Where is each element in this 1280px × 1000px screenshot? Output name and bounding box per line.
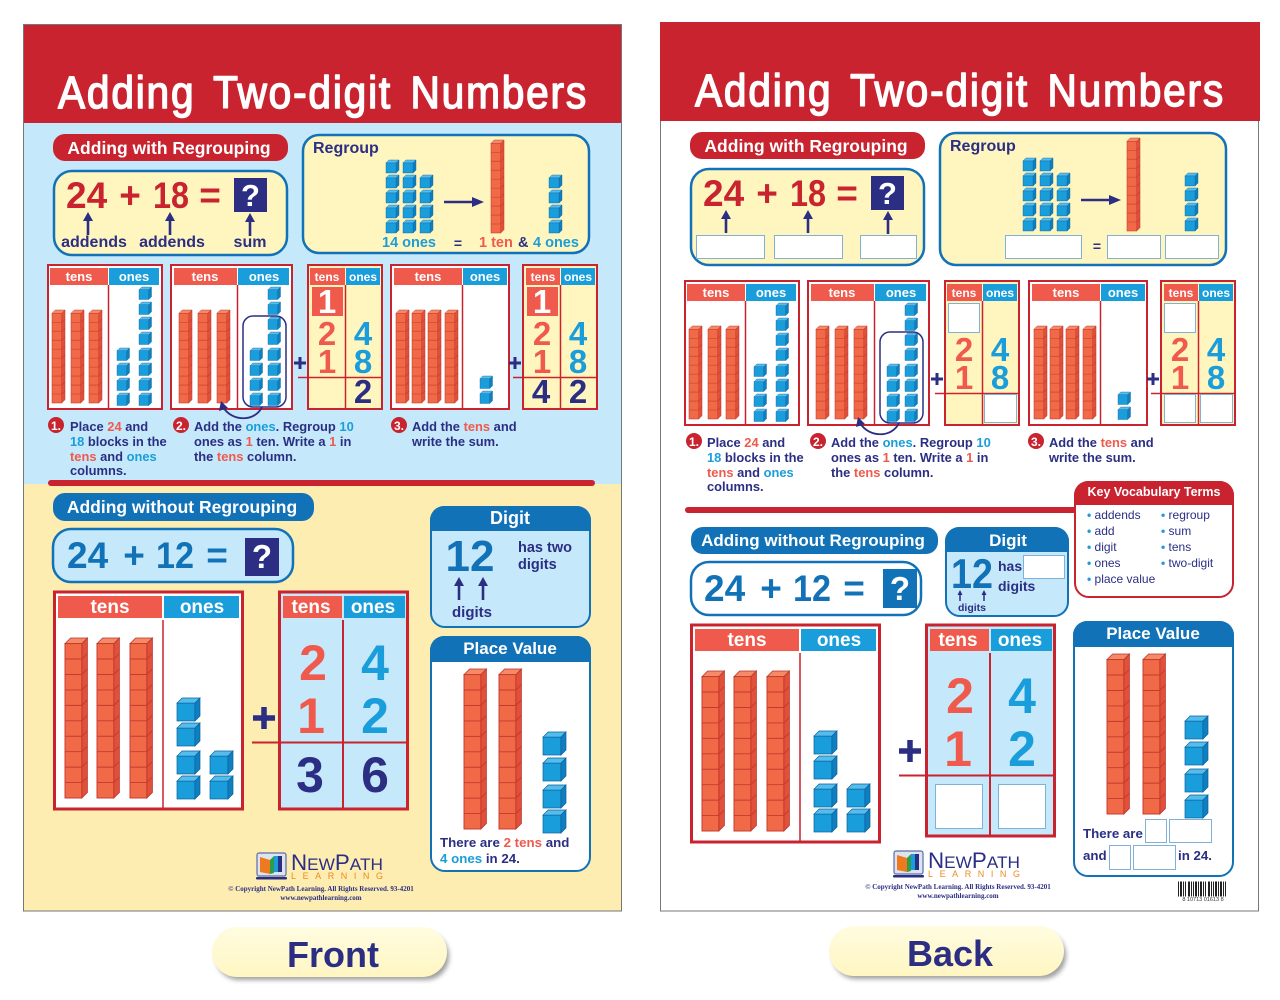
title: front: Adding Two-digit Numbers [58, 67, 588, 118]
text: step 1: 1. [51, 419, 61, 433]
panel: place value (back): Place Value [1106, 624, 1200, 643]
panel: regroup (back): Regroup [950, 138, 1016, 155]
heading: adding without regrouping [53, 493, 314, 521]
text: step 3: write the sum. [411, 434, 499, 449]
panel: step 2 place value chart (back) [808, 281, 929, 434]
panel: step 3 sum with blanks: 1 [1171, 359, 1189, 396]
panel: step 3 place value chart: ones [470, 269, 500, 284]
panel: digit (back): has [998, 558, 1022, 574]
panel: place value: 4 ones in 24. [440, 851, 520, 866]
panel: equation 24 + 12 (back): = [843, 568, 865, 609]
barcode: 8 10713 01613 8 [1182, 897, 1224, 903]
panel: step 3 written sum: 1 [533, 343, 551, 380]
panel: step 3 written sum [509, 265, 597, 410]
text: step 2 (back) [810, 433, 991, 480]
panel: step 3 written sum: 4 [532, 373, 551, 410]
logo: front: LEARNING [291, 871, 383, 881]
panel: step 2 sum with blanks [931, 281, 1019, 425]
panel: step 3 written sum: 1 [533, 283, 551, 320]
panel: regroup: 4 ones [533, 235, 579, 251]
panel: step 3 sum with blanks: ones [1202, 286, 1230, 300]
panel: step 2 sum with blanks: 2 [955, 331, 973, 368]
panel: step 3 sum with blanks: 4 [1207, 331, 1226, 368]
text: step 3 (back): Add the tens and [1049, 435, 1154, 450]
panel: step 2 sum with blanks: tens [952, 286, 977, 300]
text: step 1: columns. [70, 463, 127, 478]
panel: place value (back): There are [1083, 826, 1143, 841]
panel: equation 24 + 18: 24 [66, 175, 108, 216]
logo: front: NEWPATH [291, 850, 383, 875]
panel: step 3 written sum: ones [564, 270, 592, 284]
panel: place value: Place Value [463, 639, 557, 658]
panel: key vocabulary terms: • regroup [1161, 508, 1210, 522]
panel: regroup: & [518, 235, 529, 251]
text: step 3 (back): write the sum. [1048, 450, 1136, 465]
panel: step 3 sum with blanks: 8 [1207, 359, 1225, 396]
logo: back: © Copyright NewPath Learning. All Rights Reserved. 93-4201 [865, 883, 1051, 891]
text: step 2 (back): ones as 1 ten. Write a 1 in [831, 450, 989, 465]
panel: large written sum: tens [291, 597, 331, 618]
panel: equation with blanks: ? [878, 176, 897, 211]
panel: key vocabulary terms: • add [1087, 524, 1115, 538]
panel: digit (back): digits [958, 602, 986, 614]
panel: equation 24 + 12 (back): + [760, 568, 782, 609]
panel: equation 24 + 18 [54, 171, 287, 255]
text: step 3 (back) [1028, 433, 1154, 465]
panel: equation 24 + 12 (back): 12 [793, 568, 831, 609]
heading: adding without regrouping: Adding without Regrouping [67, 497, 297, 517]
panel: key vocabulary terms: • two-digit [1161, 556, 1214, 570]
panel: large place value chart (back) [692, 625, 880, 842]
panel: digit (back): digits [998, 578, 1036, 594]
panel: step 3 sum with blanks: tens [1169, 286, 1194, 300]
panel: step 3 written sum: 2 [569, 373, 587, 410]
logo: back [865, 848, 1051, 900]
panel: equation 24 + 18: + [119, 175, 141, 216]
text: step 1 (back) [686, 433, 804, 494]
panel: step 2 written sum: 2 [354, 373, 372, 410]
panel: equation 24 + 12 [53, 529, 293, 582]
panel: step 2 written sum: 8 [354, 343, 372, 380]
panel: place value [430, 636, 591, 871]
panel: step 2 place value chart (back): ones [886, 285, 916, 300]
panel: place value (back): in 24. [1178, 848, 1212, 863]
text: step 3 (back): 3. [1031, 435, 1041, 449]
poster: back [660, 22, 1260, 911]
panel: step 1 place value chart: ones [119, 269, 149, 284]
panel: step 1 place value chart [48, 265, 162, 409]
panel: key vocabulary terms: • place value [1087, 572, 1156, 586]
panel: large written sum: 1 [297, 688, 325, 744]
panel: place value: There are 2 tens and [440, 835, 569, 850]
panel: large sum with blanks: 2 [946, 668, 974, 724]
panel: equation 24 + 18: ? [241, 178, 260, 213]
text: step 3: Add the tens and [412, 419, 517, 434]
panel: step 2 sum with blanks: ones [986, 286, 1014, 300]
panel: large place value chart: ones [180, 597, 224, 618]
panel: step 2 place value chart: ones [249, 269, 279, 284]
panel: regroup: Regroup [313, 140, 379, 157]
panel: equation 24 + 18: 18 [153, 175, 189, 216]
panel: digit: digits [518, 557, 557, 573]
heading: adding with regrouping (back) [690, 132, 925, 159]
panel: step 2 written sum: tens [315, 270, 340, 284]
panel: step 1 place value chart: tens [66, 269, 92, 284]
panel: step 3 place value chart: tens [415, 269, 441, 284]
heading: adding with regrouping [53, 134, 288, 161]
panel: step 1 place value chart (back): ones [756, 285, 786, 300]
panel: regroup (back): = [1093, 238, 1101, 254]
panel: equation 24 + 12 (back): ? [890, 570, 910, 607]
panel: place value (back) [1073, 621, 1234, 876]
panel: digit: has two [518, 540, 572, 556]
panel: equation 24 + 12 (back) [691, 562, 921, 615]
panel: large sum with blanks [899, 625, 1055, 836]
panel: large place value chart [54, 592, 242, 809]
panel: equation 24 + 12 (back): 24 [704, 568, 746, 609]
panel: step 3 place value chart (back): ones [1108, 285, 1138, 300]
panel: step 2 sum with blanks: 4 [991, 331, 1010, 368]
poster: front [24, 24, 622, 911]
panel: equation 24 + 18: addends [61, 234, 127, 251]
logo: back: LEARNING [928, 869, 1020, 879]
panel: step 2 place value chart (back): tens [829, 285, 855, 300]
text: step 2 (back): the tens column. [831, 465, 933, 480]
panel: large written sum: ones [351, 597, 395, 618]
panel: step 3 place value chart (back): tens [1053, 285, 1079, 300]
text: step 1 (back): columns. [707, 479, 764, 494]
panel: step 2 place value chart: tens [192, 269, 218, 284]
panel: digit (back): Digit [989, 531, 1027, 550]
panel: equation 24 + 18: = [199, 175, 221, 216]
panel: step 3 written sum: 8 [569, 343, 587, 380]
text: step 2: Add the ones. Regroup 10 [194, 419, 354, 434]
panel: key vocabulary terms: • addends [1087, 508, 1141, 522]
text: step 1 [48, 417, 167, 478]
button: back [829, 926, 1066, 979]
panel: digit (back) [945, 527, 1069, 616]
text: step 1: Place 24 and [70, 419, 148, 434]
text: step 2: 2. [176, 419, 186, 433]
title: back: Adding Two-digit Numbers [695, 65, 1225, 116]
panel: large sum with blanks: 4 [1008, 668, 1036, 724]
text: step 3: 3. [394, 419, 404, 433]
text: step 2 [173, 417, 354, 464]
panel: key vocabulary terms: Key Vocabulary Terms [1088, 485, 1221, 499]
barcode [1178, 889, 1228, 903]
panel: key vocabulary terms: • digit [1087, 540, 1117, 554]
text: step 1: tens and ones [70, 449, 157, 464]
panel: step 3 place value chart (back) [1029, 281, 1147, 425]
text: step 1 (back): Place 24 and [707, 435, 785, 450]
button: back: Back [907, 933, 994, 974]
panel: digit: 12 [446, 532, 494, 581]
panel: step 3 sum with blanks [1147, 281, 1235, 425]
panel: equation with blanks: = [836, 173, 858, 214]
logo: back: www.newpathlearning.com [917, 892, 999, 900]
text: step 1: 18 blocks in the [70, 434, 167, 449]
heading: adding without regrouping (back): Adding without Regrouping [701, 531, 925, 550]
logo: front: www.newpathlearning.com [280, 894, 362, 902]
panel: step 3 written sum: 4 [569, 315, 588, 352]
text: step 1 (back): 18 blocks in the [707, 450, 804, 465]
heading: adding with regrouping (back): Adding with Regrouping [704, 136, 908, 156]
panel: large written sum [252, 592, 408, 809]
button: front: Front [287, 934, 379, 975]
panel: digit (back): 12 [951, 550, 993, 597]
heading: adding without regrouping (back) [691, 527, 938, 554]
panel: equation with blanks: 18 [790, 173, 826, 214]
panel: step 2 place value chart [171, 265, 292, 418]
panel: regroup [303, 135, 589, 253]
panel: step 3 sum with blanks: 2 [1171, 331, 1189, 368]
text: step 2: ones as 1 ten. Write a 1 in [194, 434, 352, 449]
panel: step 2 written sum [294, 265, 382, 410]
panel: large place value chart: tens [90, 597, 130, 618]
text: step 2 (back): Add the ones. Regroup 10 [831, 435, 991, 450]
panel: equation 24 + 12: = [206, 535, 228, 576]
panel: key vocabulary terms: • ones [1087, 556, 1121, 570]
panel: regroup (back) [940, 133, 1226, 265]
panel: step 1 place value chart (back) [685, 281, 799, 425]
panel: large place value chart (back): tens [727, 630, 767, 651]
panel: large sum with blanks: ones [998, 630, 1042, 651]
panel: large written sum: 6 [361, 747, 389, 803]
panel: step 2 written sum: 2 [318, 315, 336, 352]
panel: step 2 written sum: 1 [318, 283, 336, 320]
panel: large sum with blanks: 2 [1008, 721, 1036, 777]
text: step 1 (back): 1. [689, 435, 699, 449]
text: step 2 (back): 2. [813, 435, 823, 449]
panel: large place value chart (back): ones [817, 630, 861, 651]
panel: step 3 written sum: 2 [533, 315, 551, 352]
panel: key vocabulary terms: • sum [1161, 524, 1191, 538]
panel: place value (back): and [1083, 848, 1107, 863]
panel: digit [430, 506, 591, 627]
panel: equation with blanks: 24 [703, 173, 745, 214]
logo: back: NEWPATH [928, 848, 1020, 873]
panel: large written sum: 3 [296, 747, 324, 803]
panel: equation 24 + 12: + [123, 535, 145, 576]
panel: equation with blanks: + [756, 173, 778, 214]
panel: equation 24 + 18: addends [139, 234, 205, 251]
logo: front [228, 850, 414, 902]
panel: equation with blanks [691, 169, 924, 265]
logo: front: © Copyright NewPath Learning. All Rights Reserved. 93-4201 [228, 885, 414, 893]
panel: key vocabulary terms: • tens [1161, 540, 1191, 554]
panel: step 2 written sum: 1 [318, 343, 336, 380]
button: front [212, 927, 449, 980]
panel: step 3 written sum: tens [531, 270, 556, 284]
panel: equation 24 + 12: 24 [67, 535, 109, 576]
text: step 2: the tens column. [194, 449, 296, 464]
panel: digit: digits [452, 604, 492, 621]
panel: regroup: 1 ten [479, 235, 513, 251]
panel: equation 24 + 12: ? [252, 538, 272, 575]
panel: large sum with blanks: 1 [944, 721, 972, 777]
text: step 1 (back): tens and ones [707, 465, 794, 480]
panel: step 2 written sum: 4 [354, 315, 373, 352]
text: step 3 [391, 417, 517, 449]
panel: step 2 written sum: ones [349, 270, 377, 284]
panel: equation 24 + 12: 12 [156, 535, 194, 576]
panel: large sum with blanks: tens [938, 630, 978, 651]
panel: digit: Digit [490, 508, 530, 528]
panel: large written sum: 2 [299, 635, 327, 691]
panel: step 2 sum with blanks: 1 [955, 359, 973, 396]
panel: equation 24 + 18: sum [234, 234, 266, 251]
panel: regroup: = [454, 235, 462, 251]
panel: large written sum: 4 [361, 635, 389, 691]
heading: adding with regrouping: Adding with Regrouping [67, 138, 271, 158]
panel: step 3 place value chart [391, 265, 509, 409]
panel: step 2 sum with blanks: 8 [991, 359, 1009, 396]
panel: regroup: 14 ones [382, 235, 436, 251]
panel: step 1 place value chart (back): tens [703, 285, 729, 300]
panel: key vocabulary terms [1074, 481, 1234, 597]
panel: large written sum: 2 [361, 688, 389, 744]
